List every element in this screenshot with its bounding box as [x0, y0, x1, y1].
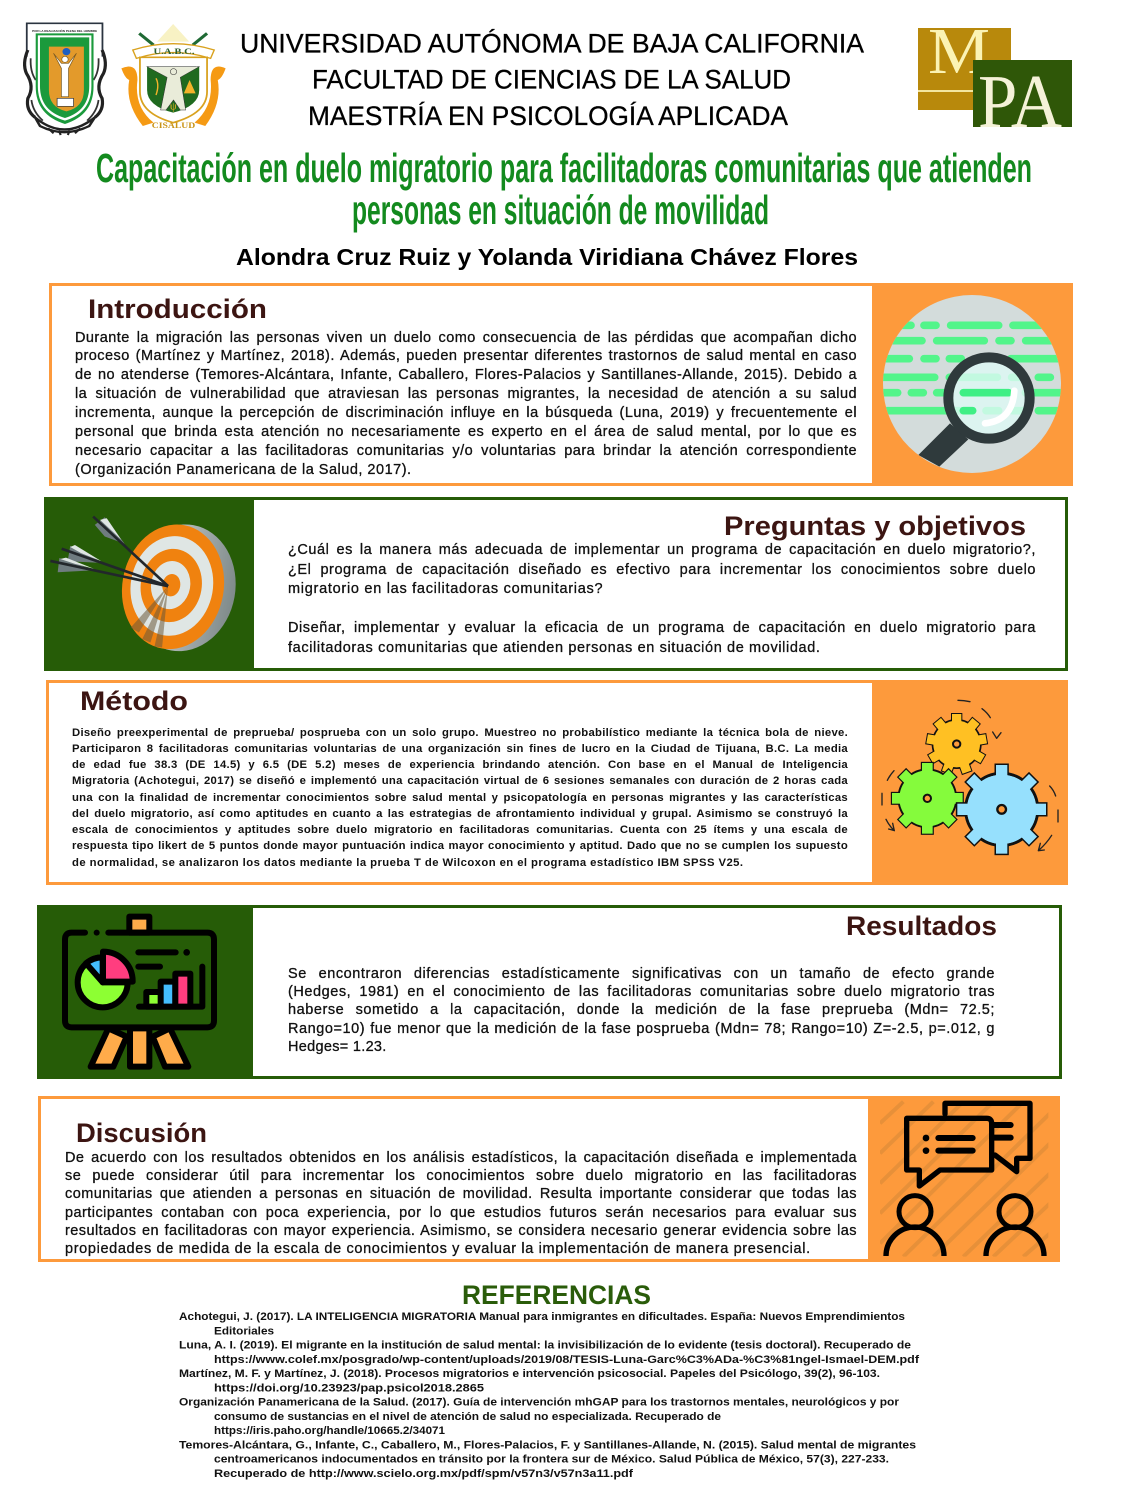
text: reference list: https://www.colef.mx/posgrado/wp-content/uploads/2019/08/TESIS-Luna-Garc%C3%ADa-%C3%81ngel-Ismael-DEM.pdf — [214, 1354, 919, 1366]
text: introducción: necesario capacitar a las facilitadoras comunitarias y/o voluntarias para brindar la atención correspondiente — [75, 443, 857, 459]
text: reference list: consumo de sustancias en el nivel de atención de salud no especializada. Recuperado de — [214, 1411, 721, 1423]
heading: introducción: Introducción — [88, 294, 267, 324]
text: método — [72, 727, 848, 869]
text: discusión: propiedades de medida de la escala de conocimientos y evaluar la implementación de manera presencial. — [65, 1241, 811, 1257]
text: método: de normalidad, se analizaron los datos mediante la prueba T de Wilcoxon en el programa estadístico IBM SPSS V25. — [72, 857, 743, 869]
icon: presentation board with charts — [62, 914, 217, 1070]
text: resultados: (Hedges, 1981) en el conocimiento de las facilitadoras comunitarias sobre duelo migratorio tras — [288, 984, 995, 1000]
text: método: respuesta tipo likert de 5 puntos donde mayor puntuación indica mayor conocimiento y aptitud. Dado que no se cumplen los supuesto — [72, 840, 848, 852]
text: discusión — [65, 1150, 857, 1257]
text: introducción: (Organización Panamericana de la Salud, 2017). — [75, 462, 412, 478]
section: referencias — [179, 1280, 920, 1480]
text: método: Migratoria (Achotegui, 2017) se diseñó e implementó una capacitación virtual de 6 sesiones semanales con duración de 2 horas cada — [72, 775, 848, 787]
text: reference list: Recuperado de http://www.scielo.org.mx/pdf/spm/v57n3/v57n3a11.pdf — [214, 1468, 633, 1480]
text: método: escala de conocimientos y aptitudes sobre duelo migratorio en facilitadoras comunitarias. Cuenta con 25 ítems y una escala de — [72, 824, 848, 836]
text: preguntas y objetivos: facilitadoras comunitarias que atienden personas en situación de movilidad. — [288, 640, 821, 656]
title: personas en situación de movilidad — [352, 187, 769, 233]
panel: preguntas y objetivos — [44, 497, 1068, 671]
text: preguntas y objetivos: ¿El programa de capacitación diseñado es efectivo para incrementar los conocimientos sobre duelo — [288, 562, 1036, 578]
heading: discusión: Discusión — [76, 1118, 207, 1148]
text: reference list — [179, 1311, 920, 1480]
text: discusión: se puede considerar útil para incrementar los conocimientos sobre duelo migratorio en las facilitadoras — [65, 1168, 857, 1184]
title — [96, 145, 1032, 233]
text: resultados: Hedges= 1.23. — [288, 1039, 387, 1055]
icon: magnifying glass over text — [883, 295, 1061, 473]
university heading: MAESTRÍA EN PSICOLOGÍA APLICADA — [308, 101, 788, 131]
text: reference list: https://iris.paho.org/handle/10665.2/34071 — [214, 1425, 445, 1437]
text: preguntas y objetivos: Diseñar, implementar y evaluar la eficacia de un programa de capacitación en duelo migratorio para — [288, 620, 1036, 636]
text: reference list: Luna, A. I. (2019). El migrante en la institución de salud mental: la invisibilización de lo evidente (tesis doctoral). Recuperado de — [179, 1340, 911, 1352]
text: introducción: de no atenderse (Temores-Alcántara, Infante, Caballero, Flores-Palacios y Santillanes-Allande, 2015). Debido a — [75, 367, 857, 383]
university heading — [240, 28, 864, 131]
heading: referencias: REFERENCIAS — [462, 1280, 651, 1310]
text: introducción: incrementa, aunque la percepción de discriminación influye en la búsqueda (Luna, 2019) y frecuentemente el — [75, 405, 857, 421]
text: reference list: Organización Panamericana de la Salud. (2017). Guía de intervención mhGAP para los trastornos mentales, neurológicos y por — [179, 1396, 900, 1408]
text: introducción: la situación de vulnerabilidad que atraviesan las personas migrantes, la necesidad de atención a su salud — [75, 386, 857, 402]
text: reference list: https://doi.org/10.23923/pap.psicol2018.2865 — [214, 1382, 484, 1394]
text: resultados — [288, 966, 995, 1055]
text: método: una con la finalidad de incrementar conocimientos sobre salud mental y psicopatología en personas migrantes y las características — [72, 792, 848, 804]
logo: CISALUD crest: ψ — [170, 102, 177, 112]
text: método: Participaron 8 facilitadoras comunitarias voluntarias de una organización sin fines de lucro en la Ciudad de Tijuana, B.C. La media — [72, 743, 848, 755]
text: preguntas y objetivos: migratorio en las facilitadoras comunitarias? — [288, 581, 603, 597]
text: introducción: personal que brinda esta atención no necesariamente es experto en el área de salud mental, por lo que es — [75, 424, 857, 440]
university heading: UNIVERSIDAD AUTÓNOMA DE BAJA CALIFORNIA — [240, 28, 864, 58]
panel: introducción — [49, 283, 1073, 486]
text: resultados: haberse sometido a la capacitación, donde la medición de la fase preprueba (Mdn= 72.5; — [288, 1002, 995, 1018]
icon: target with arrows — [50, 516, 236, 652]
text: resultados: Rango=10) fue menor que la medición de la fase posprueba (Mdn= 78; Rango=10) Z=-2.5, p=.012, g — [288, 1021, 995, 1037]
text: resultados: Se encontraron diferencias estadísticamente significativas con un tamaño de efecto grande — [288, 966, 995, 982]
header — [23, 15, 1072, 270]
text: reference list: Achotegui, J. (2017). LA INTELIGENCIA MIGRATORIA Manual para inmigrantes en dificultades. España: Nuevos Emprendimientos — [179, 1311, 905, 1323]
panel: método — [46, 680, 1068, 885]
yellow gear — [926, 714, 987, 774]
text: reference list: Editoriales — [214, 1325, 274, 1337]
icon: gears — [881, 700, 1059, 856]
text: introducción: proceso (Martínez y Martínez, 2018). Además, pueden presentar diferentes trastornos de salud mental en caso — [75, 348, 857, 364]
blue gear — [957, 765, 1046, 854]
logo: UABC shield: POR LA REALIZACIÓN PLENA DEL HOMBRE — [32, 28, 97, 33]
authors: Alondra Cruz Ruiz y Yolanda Viridiana Chávez Flores — [236, 244, 858, 270]
logo: MPA — [918, 15, 1072, 144]
university heading: FACULTAD DE CIENCIAS DE LA SALUD — [312, 64, 791, 94]
panel: resultados — [37, 905, 1062, 1079]
text: método: Diseño preexperimental de preprueba/ posprueba con un solo grupo. Muestreo no probabilístico mediante la técnica bola de nieve. — [72, 727, 848, 739]
logo: MPA: M — [928, 15, 990, 88]
icon: people talking — [880, 1100, 1048, 1256]
text: reference list: Temores-Alcántara, G., Infante, C., Caballero, M., Flores-Palacios, F. y Santillanes-Allande, N. (2015). Salud mental de migrantes — [179, 1439, 916, 1451]
text: reference list: centroamericanos indocumentados en tránsito por la frontera sur de México. Salud Pública de México, 57(3), 227-233. — [214, 1454, 889, 1466]
logo: CISALUD crest: CISALUD — [152, 120, 196, 130]
heading: resultados: Resultados — [846, 911, 997, 941]
text: discusión: resultados en facilitadoras con mayor experiencia. Asimismo, se considera necesario generar evidencia sobre las — [65, 1223, 857, 1239]
heading: método: Método — [80, 686, 188, 716]
text: discusión: De acuerdo con los resultados obtenidos en los análisis estadísticos, la capacitación diseñada e implementada — [65, 1150, 857, 1166]
logo: CISALUD crest — [121, 24, 226, 130]
panel: discusión — [38, 1096, 1060, 1262]
text: introducción — [75, 330, 857, 478]
text: discusión: comunitarias que atienden a personas en situación de movilidad. Resulta importante considerar que todas las — [65, 1186, 857, 1202]
logo: UABC shield — [25, 23, 105, 135]
text: método: del duelo migratorio, así como aptitudes en cuanto a las estrategias de afrontamiento individual y grupal. Asimismo se construyó la — [72, 808, 848, 820]
green gear — [892, 763, 963, 834]
text: método: de edad fue 38.3 (DE 14.5) y 6.5 (DE 5.2) meses de experiencia brindando atención. Con base en el Manual de Inteligencia — [72, 759, 848, 771]
text: reference list: Martínez, M. F. y Martínez, J. (2018). Procesos migratorios e intervención psicosocial. Papeles del Psicólogo, 39(2), 96-103. — [179, 1368, 880, 1380]
text: preguntas y objetivos — [288, 542, 1036, 656]
heading: preguntas y objetivos: Preguntas y objetivos — [724, 511, 1026, 541]
text: preguntas y objetivos: ¿Cuál es la manera más adecuada de implementar un programa de capacitación en duelo migratorio?, — [288, 542, 1036, 558]
logo: CISALUD crest: U.A.B.C. — [154, 46, 195, 56]
text: discusión: participantes contaban con poca experiencia, por lo que estudios futuros serán necesarios para evaluar sus — [65, 1205, 857, 1221]
text: introducción: Durante la migración las personas viven un duelo como consecuencia de las pérdidas que acompañan dicho — [75, 330, 857, 346]
